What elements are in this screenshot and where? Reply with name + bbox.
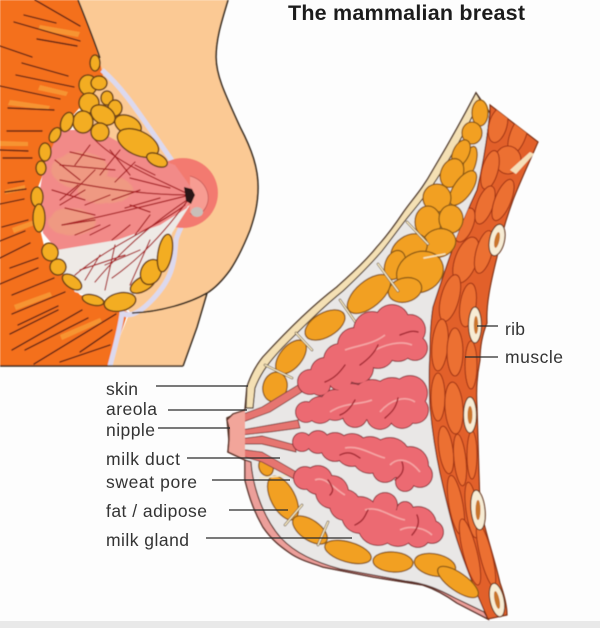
label: areola: areola xyxy=(106,399,157,419)
lobe highlights xyxy=(315,335,432,535)
gland light area xyxy=(52,205,190,299)
panel: frontal cutaway breast illustration xyxy=(0,0,258,366)
connective septa xyxy=(265,222,428,545)
skin layer xyxy=(246,93,480,408)
areola xyxy=(148,158,218,228)
muscle highlights xyxy=(0,25,102,340)
label: milk duct: milk duct xyxy=(106,449,180,469)
label: muscle: muscle xyxy=(505,347,563,367)
skin outline xyxy=(0,0,258,366)
label: rib: rib xyxy=(505,319,525,339)
blood vessels xyxy=(52,140,190,290)
muscle fibres xyxy=(0,0,116,364)
label: skin: skin xyxy=(106,379,138,399)
label: fat / adipose: fat / adipose xyxy=(106,501,207,521)
panel: side cross-section diagram xyxy=(227,93,538,619)
milk ducts xyxy=(230,385,302,480)
label: nipple xyxy=(106,420,230,440)
rib marrow xyxy=(468,232,501,609)
glandular pale texture xyxy=(48,152,133,235)
label: sweat pore: sweat pore xyxy=(106,472,197,492)
nipple xyxy=(184,187,195,204)
fat lobes: left cutaway xyxy=(31,55,175,314)
muscle wall xyxy=(429,105,538,619)
nipple tip xyxy=(227,410,245,460)
lower skin layer xyxy=(245,460,488,619)
label: rib xyxy=(477,319,525,339)
bottom grey strip xyxy=(0,621,600,628)
skin silhouette xyxy=(78,0,258,366)
ribs xyxy=(464,152,534,618)
membrane around gland xyxy=(102,70,193,366)
body of the section xyxy=(227,93,490,619)
muscle bundles xyxy=(430,105,532,588)
label: muscle xyxy=(465,347,563,367)
label: nipple: nipple xyxy=(106,420,155,440)
chest muscle xyxy=(0,0,128,366)
gland pink tissue xyxy=(40,130,193,250)
label: milk gland: milk gland xyxy=(106,530,189,550)
lobe creases xyxy=(325,331,418,535)
glandular lobes: outline layer xyxy=(292,304,444,548)
fat lobes xyxy=(256,100,488,603)
glandular lobes: fill layer xyxy=(293,305,443,547)
title: The mammalian breast xyxy=(288,1,525,25)
